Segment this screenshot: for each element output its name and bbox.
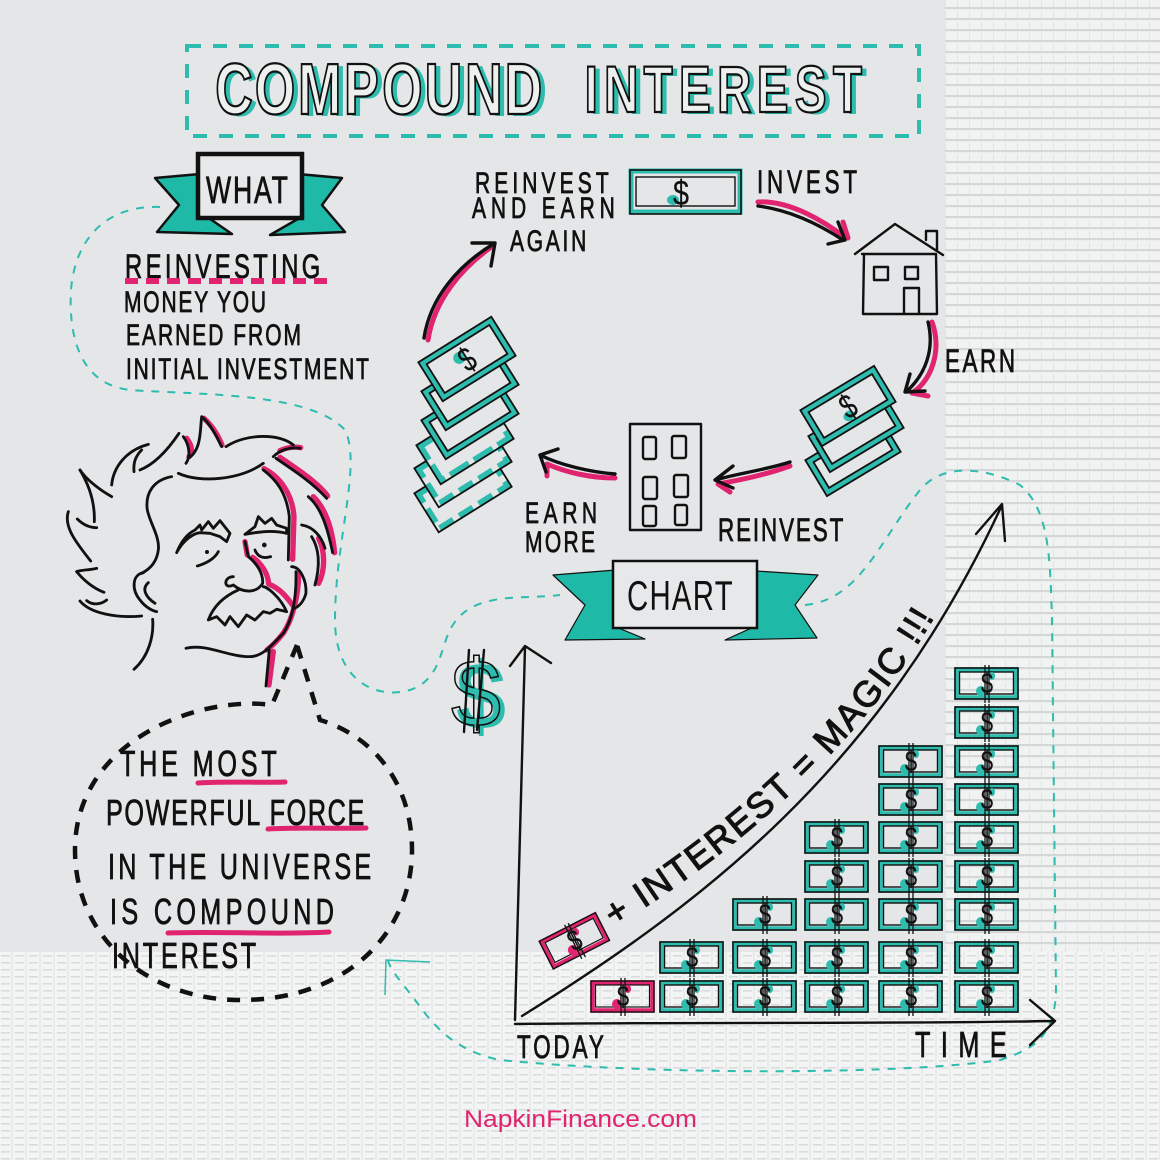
bill column 2: $	[759, 981, 771, 1013]
bill column 3	[805, 819, 868, 1016]
eye dots	[205, 543, 267, 554]
cycle diagram	[414, 164, 1015, 559]
icon: six bill stack: $	[452, 340, 484, 380]
title word: compound: COMPOUND	[215, 50, 542, 130]
bill column 2	[733, 896, 796, 1016]
label: invest: INVEST	[757, 164, 857, 200]
pink today bill: $	[617, 981, 629, 1013]
chart ribbon	[553, 561, 818, 640]
pink tilted bill: $	[562, 924, 588, 958]
pink dashed underline	[125, 278, 328, 284]
bill column 4	[879, 743, 942, 1016]
bill column 5: $	[981, 668, 993, 700]
pink tilted bill	[538, 910, 611, 972]
label box	[198, 154, 302, 218]
quote line 4: IS COMPOUND	[110, 892, 334, 932]
bill column 5	[955, 665, 1018, 1016]
chart text: CHART	[627, 572, 733, 619]
bill column 3: $	[831, 942, 843, 974]
bill column 1	[660, 939, 723, 1016]
bill column 3: $	[831, 981, 843, 1013]
bill column 4: $	[905, 942, 917, 974]
title dashed box	[187, 46, 919, 136]
bill column 5: $	[981, 707, 993, 739]
bill column 4: $	[905, 746, 917, 778]
icon: building	[630, 424, 701, 530]
quote line 5: INTEREST	[112, 936, 256, 976]
growth chart	[508, 502, 1056, 1065]
speech bubble	[75, 645, 412, 1000]
bill column 4: $	[905, 822, 917, 854]
label: reinvest and earn again: AGAIN	[510, 226, 586, 258]
icon: house	[855, 224, 943, 314]
label: reinvest and earn again: REINVEST	[475, 168, 609, 200]
label: reinvest and earn again: AND EARN	[472, 193, 615, 225]
connecting teal dashed path left	[71, 207, 560, 692]
bill column 2: $	[759, 899, 771, 931]
arrow: house to stack	[905, 322, 936, 396]
bill column 5: $	[981, 784, 993, 816]
time label: TIME	[915, 1025, 1007, 1065]
arrow: building to big stack	[540, 449, 615, 478]
label: earn more: MORE	[525, 527, 595, 559]
bill column 5: $	[981, 861, 993, 893]
bill column 3: $	[831, 899, 843, 931]
bubble outline	[75, 645, 412, 1000]
interest magic text: + INTEREST = MAGIC !!!	[608, 606, 934, 920]
connecting teal dashed path right	[388, 471, 1056, 1071]
bill column 5: $	[981, 981, 993, 1013]
icon: six bill stack	[414, 317, 519, 532]
keyword: REINVESTING	[125, 248, 320, 286]
label: reinvest: REINVEST	[718, 512, 843, 548]
bill column 3: $	[831, 822, 843, 854]
label: earn: EARN	[945, 343, 1015, 379]
icon: einstein face	[67, 417, 335, 686]
bill column 1: $	[686, 942, 698, 974]
title panel	[187, 46, 919, 136]
bill column 5: $	[981, 822, 993, 854]
arrow: stack to building	[715, 462, 790, 492]
what ribbon	[155, 154, 345, 235]
label: reinvest and earn again	[472, 168, 615, 258]
footer url: NapkinFinance.com	[464, 1106, 697, 1133]
today label: TODAY	[517, 1029, 604, 1065]
title word: interest: INTEREST	[585, 53, 862, 127]
arrow: invest to house	[758, 202, 848, 244]
bill column 5: $	[981, 899, 993, 931]
quote line 3: IN THE UNIVERSE	[108, 847, 371, 887]
ribbon tails	[553, 570, 818, 640]
bill column 3: $	[831, 861, 843, 893]
what text: WHAT	[206, 168, 288, 211]
curve text path	[614, 596, 946, 927]
bill column 4: $	[905, 784, 917, 816]
body line 3: INITIAL INVESTMENT	[126, 354, 369, 386]
growth curve	[522, 504, 1005, 1016]
small teal arrow head	[385, 960, 430, 995]
label box	[613, 561, 757, 628]
ribbon tails	[155, 174, 345, 235]
title shadow compound: COMPOUND	[220, 52, 547, 132]
what definition text	[124, 248, 369, 386]
black line art	[67, 417, 333, 686]
icon: three bill stack: $	[833, 387, 864, 427]
bill column 4: $	[905, 861, 917, 893]
label: earn more	[525, 498, 597, 559]
body line 1: MONEY YOU	[124, 287, 266, 319]
bill column 4: $	[905, 981, 917, 1013]
bill column 2: $	[759, 942, 771, 974]
icon: three bill stack	[800, 366, 904, 496]
icon: single dollar bill	[630, 170, 741, 214]
bill column 1: $	[686, 981, 698, 1013]
pink underlines	[168, 782, 366, 933]
arrow: big stack back to start	[424, 243, 495, 340]
icon: single dollar bill: $	[673, 174, 689, 213]
pink face accents	[187, 418, 335, 685]
quote line 2: POWERFUL FORCE	[106, 793, 364, 833]
label: earn more: EARN	[525, 498, 597, 530]
icon: big dollar sign: $	[451, 640, 501, 747]
title shadow interest: INTEREST	[590, 55, 867, 129]
bill column 5: $	[981, 746, 993, 778]
body line 2: EARNED FROM	[126, 320, 301, 352]
pink today bill	[591, 978, 654, 1016]
icon: big dollar sign: $	[456, 643, 506, 750]
axes	[510, 646, 1055, 1045]
quote line 1: THE MOST	[120, 744, 277, 784]
bill column 5: $	[981, 942, 993, 974]
bill column 4: $	[905, 899, 917, 931]
